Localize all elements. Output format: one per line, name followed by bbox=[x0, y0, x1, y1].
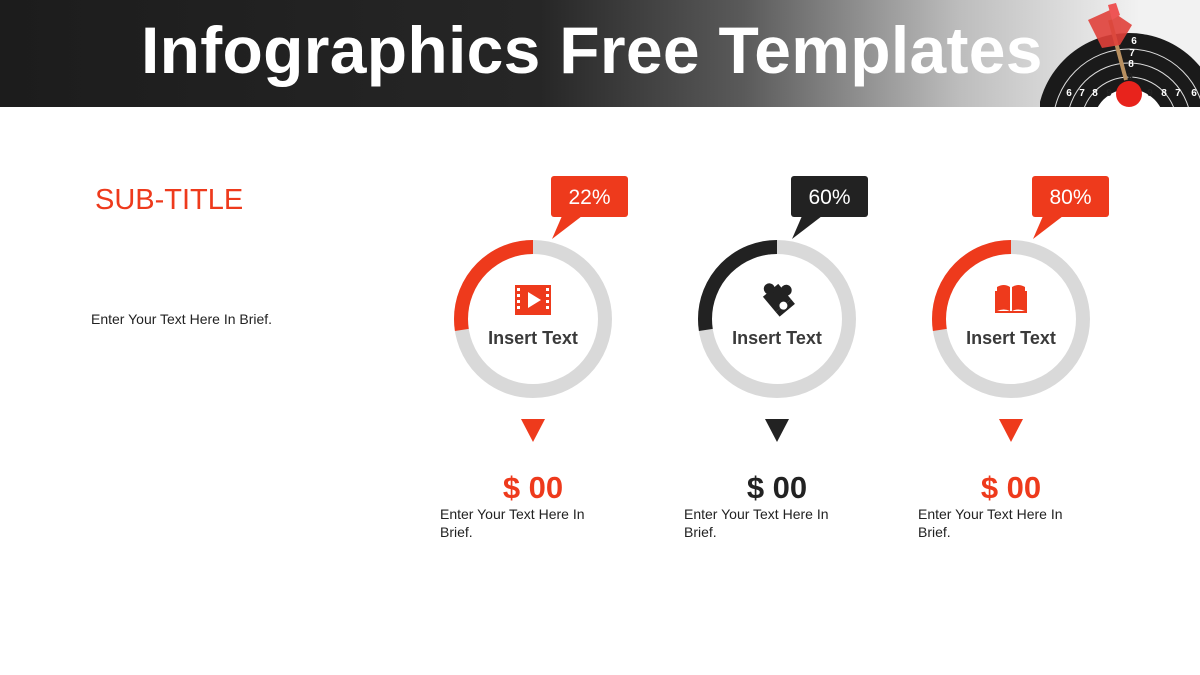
callout: 22%: 22% bbox=[568, 186, 611, 209]
text block: Enter Your Text Here In Brief. bbox=[918, 506, 1062, 540]
icon: dartboard: 9 bbox=[1106, 88, 1112, 99]
ring chart bbox=[939, 247, 1083, 391]
icon: dartboard: 6 bbox=[1131, 36, 1137, 47]
icon: dartboard: 9 bbox=[1147, 88, 1153, 99]
value: $ 00 bbox=[747, 470, 807, 505]
callout: 22% bbox=[551, 176, 628, 239]
icon: book bbox=[995, 285, 1027, 313]
text block: Enter Your Text Here In Brief. bbox=[684, 506, 828, 540]
ring chart bbox=[461, 247, 605, 391]
panel: item 3: Insert Text bbox=[966, 328, 1056, 348]
value: $ 00 bbox=[981, 470, 1041, 505]
header bar bbox=[0, 0, 1200, 107]
icon: dartboard: 7 bbox=[1129, 48, 1135, 59]
icon: dartboard: 6 bbox=[1191, 88, 1197, 99]
icon: dartboard: 6 bbox=[1066, 88, 1072, 99]
icon: puzzle bbox=[758, 273, 801, 317]
arrow bbox=[765, 419, 789, 442]
panel: item 3 bbox=[918, 176, 1109, 540]
icon: dartboard bbox=[1040, 3, 1200, 107]
icon: dartboard: 8 bbox=[1128, 59, 1134, 70]
callout: 80%: 80% bbox=[1049, 186, 1092, 209]
panel: item 1 bbox=[440, 176, 628, 540]
ring chart bbox=[705, 247, 849, 391]
arrow bbox=[999, 419, 1023, 442]
callout: 60% bbox=[791, 176, 868, 239]
panel: item 2 bbox=[684, 176, 868, 540]
title: Infographics Free Templates bbox=[141, 13, 1043, 87]
icon: dartboard: 8 bbox=[1092, 88, 1098, 99]
callout: 60%: 60% bbox=[808, 186, 851, 209]
callout: 80% bbox=[1032, 176, 1109, 239]
subtitle: SUB-TITLE bbox=[95, 184, 243, 216]
icon: dartboard: 7 bbox=[1079, 88, 1085, 99]
arrow bbox=[521, 419, 545, 442]
text block: Enter Your Text Here In Brief. bbox=[440, 506, 584, 540]
text block: intro: Enter Your Text Here In Brief. bbox=[91, 311, 272, 327]
panel: item 2: Insert Text bbox=[732, 328, 822, 348]
icon: video bbox=[515, 285, 551, 315]
icon: dartboard: 9 bbox=[1127, 72, 1133, 83]
icon: dartboard: 8 bbox=[1161, 88, 1167, 99]
icon: dartboard: 7 bbox=[1175, 88, 1181, 99]
panel: item 1: Insert Text bbox=[488, 328, 578, 348]
value: $ 00 bbox=[503, 470, 563, 505]
